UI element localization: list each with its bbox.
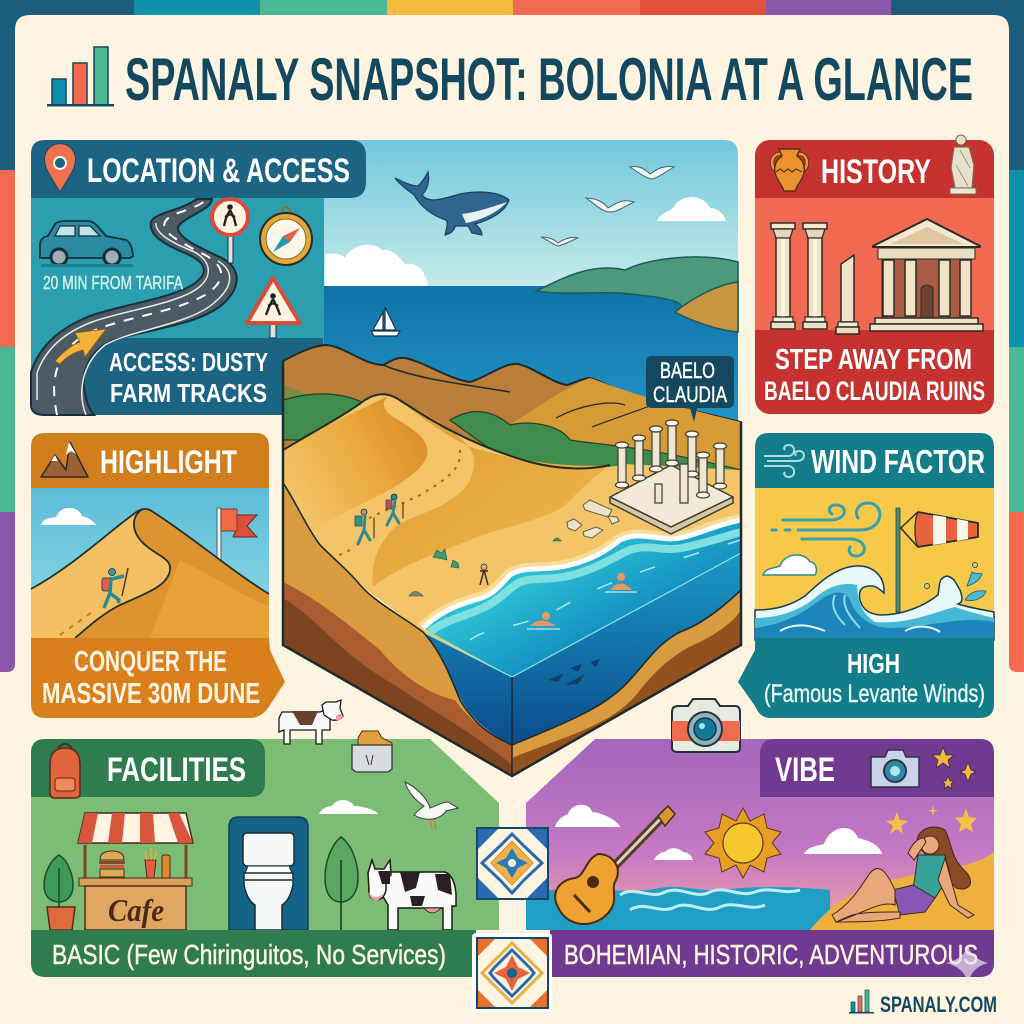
footer brand	[849, 990, 997, 1017]
plant	[44, 855, 75, 930]
panel: facilities	[31, 739, 499, 977]
label: Baelo Claudia: BAELO	[660, 358, 715, 383]
decorative tile upper	[477, 828, 548, 899]
earth left face	[283, 483, 512, 776]
caption	[31, 930, 476, 977]
heading: HISTORY	[821, 153, 931, 191]
ruin blocks	[567, 500, 619, 538]
caption line 1: HIGH	[847, 648, 900, 679]
panel: wind factor	[738, 433, 994, 718]
label: Baelo Claudia	[646, 356, 734, 422]
cloud	[41, 508, 96, 525]
wind gusts	[772, 503, 880, 556]
icon: mountain	[41, 442, 88, 477]
icon: pedestrian sign	[212, 199, 248, 263]
floating sandwich crate	[352, 731, 392, 772]
cloud	[319, 800, 378, 814]
dune footsteps	[335, 450, 460, 557]
caption text: BASIC (Few Chiringuitos, No Services)	[52, 939, 446, 970]
label: Baelo Claudia: CLAUDIA	[653, 382, 727, 407]
icon: stars	[932, 747, 976, 789]
back hills	[283, 345, 741, 520]
beach details	[433, 538, 561, 568]
tree	[325, 837, 358, 930]
dune main mass	[372, 403, 610, 587]
central sky and sea scene	[300, 140, 738, 426]
heading: LOCATION & ACCESS	[87, 152, 350, 190]
waves	[755, 562, 994, 640]
icon: statue	[950, 135, 976, 194]
icon: car	[40, 221, 133, 267]
clouds	[555, 805, 882, 860]
earth right face	[512, 590, 741, 776]
hikers	[355, 494, 403, 544]
windsock	[896, 508, 978, 612]
caption	[550, 930, 994, 977]
caption	[738, 638, 994, 718]
caption line 2: MASSIVE 30M DUNE	[42, 678, 260, 710]
icon: warning sign	[247, 278, 300, 338]
icon: yellow arrow	[55, 329, 106, 364]
sparkle watermark	[946, 944, 988, 985]
panel: history	[755, 135, 994, 414]
green hills	[283, 394, 741, 500]
sand surface	[283, 394, 741, 680]
icon: backpack	[50, 744, 80, 798]
sea	[526, 887, 830, 930]
sand hill	[810, 852, 994, 930]
ruins platform	[610, 420, 733, 534]
cloud right	[657, 197, 726, 221]
guitar	[555, 806, 675, 924]
car caption: 20 MIN FROM TARIFA	[43, 273, 183, 293]
access caption line 2: FARM TRACKS	[110, 378, 267, 408]
stars	[886, 805, 977, 834]
woman	[832, 827, 974, 922]
icon: camera	[871, 750, 919, 787]
decorative tile lower	[472, 933, 552, 1012]
caption	[31, 638, 285, 718]
central isometric terrain block	[283, 345, 741, 776]
caption line 1: CONQUER THE	[74, 646, 227, 678]
hiker	[102, 568, 128, 608]
distant headland	[536, 257, 738, 330]
cow	[368, 860, 456, 930]
dune	[31, 509, 269, 638]
seagulls	[541, 167, 674, 246]
cloud left	[325, 245, 428, 286]
colour stripe border	[0, 0, 1024, 672]
header bar	[31, 140, 366, 198]
panel: location and access	[31, 140, 366, 415]
floating camera	[672, 699, 740, 752]
cafe stall	[78, 813, 193, 930]
icon: compass	[260, 207, 312, 265]
title bar-chart icon	[47, 47, 114, 106]
floating cow	[279, 700, 343, 744]
access caption band	[60, 338, 323, 415]
block outline	[283, 361, 741, 776]
panel: highlight	[31, 433, 285, 718]
cloud	[763, 555, 816, 575]
water surface	[423, 520, 741, 628]
access caption: ACCESS: DUSTY	[109, 347, 268, 377]
whale	[395, 172, 509, 235]
heading: VIBE	[775, 751, 835, 789]
heading: FACILITIES	[107, 751, 246, 789]
icon: flag	[217, 508, 257, 566]
water cross-section	[423, 553, 741, 745]
icon: location pin	[44, 144, 76, 192]
ruined columns	[771, 223, 859, 334]
seagull	[405, 782, 458, 829]
icon: wind	[764, 445, 804, 477]
toilet	[229, 817, 308, 930]
winding road	[31, 199, 237, 415]
sailboat	[371, 307, 400, 336]
temple	[870, 219, 983, 331]
icon: amphora	[772, 149, 807, 191]
swimmers	[527, 573, 637, 629]
dune slip face	[283, 395, 427, 530]
cafe stall: Cafe	[108, 892, 164, 928]
sun	[705, 808, 781, 878]
panel: vibe	[526, 739, 994, 985]
heading: HIGHLIGHT	[100, 444, 237, 480]
